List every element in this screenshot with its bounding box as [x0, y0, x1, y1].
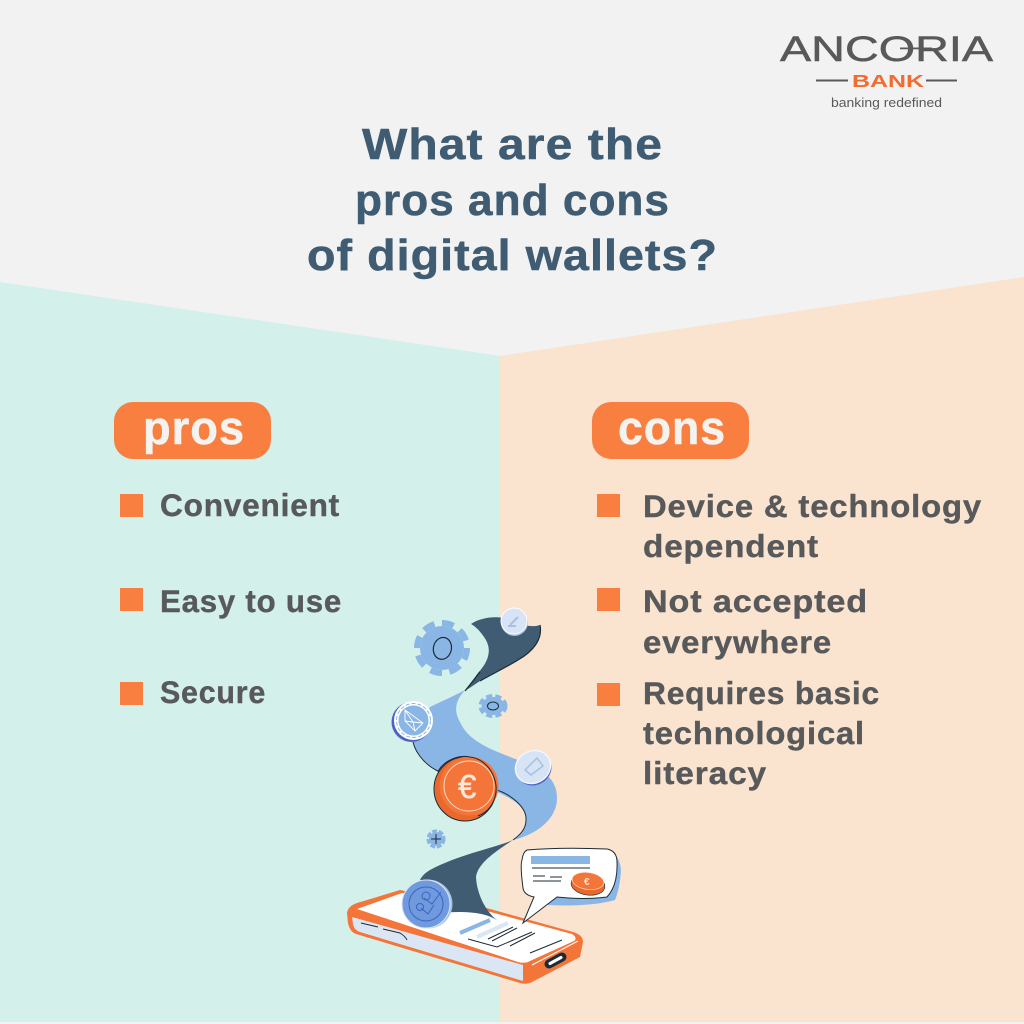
cons item: not accepted: everywhere — [643, 624, 832, 660]
dark ribbon upper — [465, 617, 540, 691]
cons item: device dependent — [597, 488, 982, 564]
card mini coin — [570, 873, 606, 897]
right glass coin — [509, 744, 558, 792]
cons item: device dependent: dependent — [643, 528, 819, 564]
card blue bar — [531, 856, 590, 864]
small plus gear — [428, 831, 444, 847]
title: pros and cons — [355, 176, 670, 225]
logo: Ancoria Bank — [780, 30, 994, 110]
phone port — [549, 957, 562, 964]
pros item: convenient: Convenient — [160, 487, 340, 523]
cons badge: cons — [618, 401, 726, 454]
cons item: requires literacy: Requires basic — [643, 675, 880, 711]
logo wordmark: ANCORIA — [780, 30, 994, 69]
cons item: not accepted: Not accepted — [643, 583, 868, 619]
panel: pros list — [114, 401, 342, 710]
light blue ribbon — [413, 690, 557, 840]
dark ribbon lower — [420, 840, 513, 921]
cons item: not accepted — [597, 583, 868, 660]
speech bubble card — [521, 848, 621, 923]
cons item: device dependent: Device & technology — [643, 488, 982, 524]
pros item: secure: Secure — [160, 674, 266, 710]
title: of digital wallets? — [307, 231, 718, 280]
small gear — [480, 696, 506, 716]
panel: pros background — [0, 282, 500, 1022]
dark ribbon outline — [465, 625, 540, 691]
mini euro symbol: € — [584, 877, 590, 888]
logo bank label: BANK — [852, 71, 925, 91]
logo tagline: banking redefined — [831, 96, 942, 110]
top glass coin — [501, 608, 528, 636]
pros badge — [114, 401, 271, 459]
ribbon outline — [413, 742, 526, 840]
title — [307, 120, 718, 280]
phone body — [347, 890, 583, 984]
euro symbol: € — [458, 768, 476, 805]
cons item: requires literacy: technological — [643, 715, 865, 751]
panel: cons list — [592, 401, 982, 791]
cons item: requires literacy: literacy — [643, 755, 767, 791]
illustration: phone with coins — [347, 608, 621, 984]
phone screen lines — [361, 923, 562, 953]
network coin — [402, 880, 452, 928]
pros item: easy to use: Easy to use — [160, 583, 342, 619]
title: What are the — [362, 120, 663, 169]
cons item: requires literacy — [597, 675, 880, 791]
cons badge — [592, 401, 749, 459]
phone highlight — [532, 941, 578, 965]
diamond coin — [392, 701, 433, 742]
pros badge: pros — [143, 401, 245, 454]
large gear — [417, 623, 467, 673]
euro coin — [434, 756, 498, 821]
panel: cons background — [500, 277, 1024, 1022]
